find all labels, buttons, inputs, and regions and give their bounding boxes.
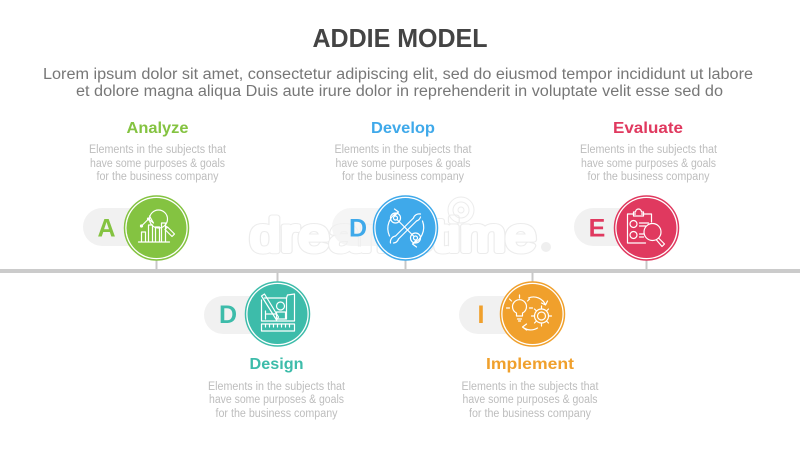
step: Implement xyxy=(459,272,599,420)
description: Develop xyxy=(334,144,472,183)
timeline xyxy=(0,269,800,273)
icon: blueprint and ruler xyxy=(262,294,294,331)
watermark xyxy=(250,197,551,261)
watermark: dreamstime xyxy=(250,209,536,261)
letter D: D xyxy=(219,301,237,329)
badge xyxy=(246,282,310,346)
letter pill xyxy=(332,208,406,246)
letter D: D xyxy=(349,214,367,242)
icon: bulb, gear and arrows xyxy=(506,295,552,330)
description: Evaluate: have some purposes & goals xyxy=(581,158,716,170)
icon: chart and magnifier xyxy=(138,210,174,242)
description: Evaluate xyxy=(580,144,718,183)
description: Design: for the business company xyxy=(216,408,338,420)
description: Analyze xyxy=(89,144,227,183)
connector xyxy=(532,272,534,284)
step: Evaluate xyxy=(574,120,718,270)
badge xyxy=(374,196,438,260)
letter A: A xyxy=(97,214,116,242)
description: Evaluate: for the business company xyxy=(588,171,710,183)
badge xyxy=(614,196,678,260)
heading: Analyze: Analyze xyxy=(126,120,189,137)
connector xyxy=(276,272,278,284)
connector xyxy=(646,258,648,270)
heading: Evaluate: Evaluate xyxy=(613,120,683,137)
description: Analyze: have some purposes & goals xyxy=(90,158,225,170)
letter pill xyxy=(204,296,278,334)
letter I: I xyxy=(478,301,484,329)
description: Implement: Elements in the subjects that xyxy=(462,381,599,393)
icon: crossed wrenches with arrows xyxy=(388,209,424,247)
heading: Implement: Implement xyxy=(486,356,574,373)
subtitle xyxy=(43,66,753,100)
description: Develop: Elements in the subjects that xyxy=(334,144,472,156)
step: Analyze xyxy=(83,120,227,270)
description: Evaluate: Elements in the subjects that xyxy=(580,144,718,156)
watermark: dreamstime xyxy=(250,209,536,261)
description: Develop: have some purposes & goals xyxy=(336,158,471,170)
description: Design: Elements in the subjects that xyxy=(208,381,346,393)
description: Design xyxy=(208,381,346,420)
description: Implement: for the business company xyxy=(469,408,591,420)
description: Develop: for the business company xyxy=(342,171,464,183)
letter E: E xyxy=(589,214,605,242)
heading: Design: Design xyxy=(250,356,304,373)
letter pill xyxy=(574,208,648,246)
step: Develop xyxy=(332,120,472,270)
badge xyxy=(500,282,564,346)
subtitle: Lorem ipsum dolor sit amet, consectetur adipiscing elit, sed do eiusmod tempor incididunt ut labore xyxy=(43,66,753,83)
connector xyxy=(404,258,406,270)
description: Analyze: for the business company xyxy=(96,171,219,183)
step: Design xyxy=(204,272,346,420)
badge xyxy=(124,196,188,260)
description: Implement: have some purposes & goals xyxy=(462,394,598,406)
heading: Develop: Develop xyxy=(371,120,435,137)
letter pill xyxy=(459,296,533,334)
description: Design: have some purposes & goals xyxy=(209,394,344,406)
letter pill xyxy=(83,208,157,246)
connector xyxy=(156,258,158,270)
description: Analyze: Elements in the subjects that xyxy=(89,144,227,156)
description: Implement xyxy=(462,381,599,420)
subtitle: et dolore magna aliqua Duis aute irure dolor in reprehenderit in voluptate velit esse sed do xyxy=(76,83,723,100)
icon: clipboard and magnifier xyxy=(628,209,664,246)
title: ADDIE MODEL xyxy=(312,23,488,53)
